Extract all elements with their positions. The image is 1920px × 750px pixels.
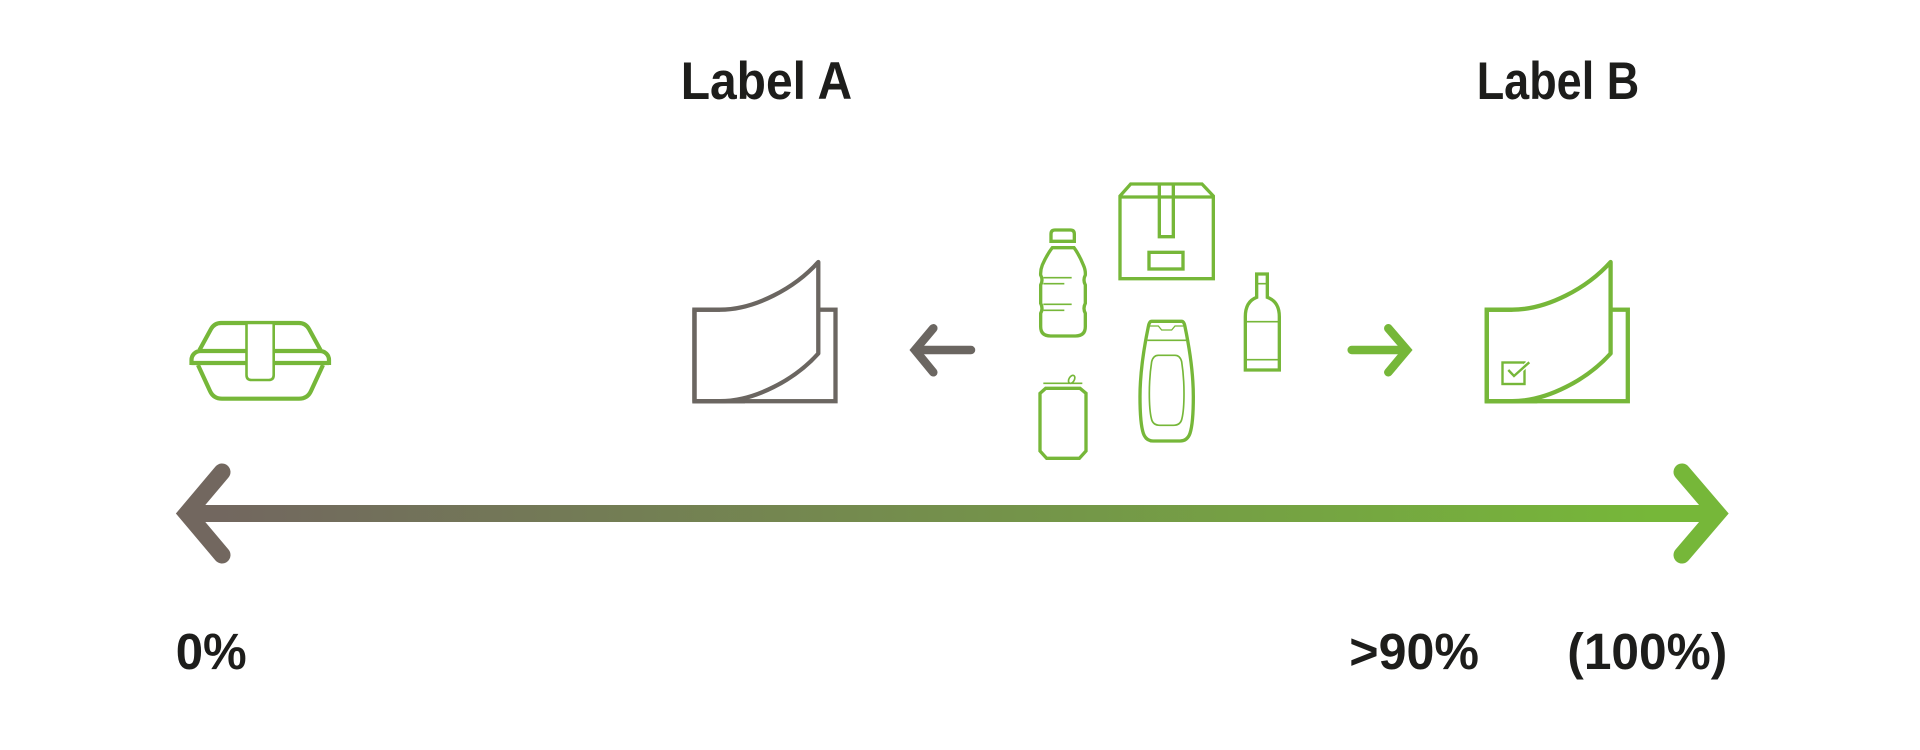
icon: gray sheet of material	[694, 262, 836, 401]
icon: shampoo bottle	[1140, 321, 1193, 441]
value label: (100%): (100%)	[1567, 623, 1727, 680]
icon: check box	[1502, 362, 1529, 384]
icon: cardboard box	[1120, 184, 1213, 279]
heading: Label B: Label B	[1477, 52, 1639, 111]
arrow: small gray pointing left	[915, 328, 971, 372]
heading: Label A: Label A	[681, 52, 852, 111]
arrow: small green pointing right	[1352, 328, 1407, 372]
value label: 0%: 0%	[176, 623, 247, 680]
icon: green certified sheet of material	[1487, 262, 1628, 401]
icon group: packaging items	[1040, 184, 1279, 458]
icon: drink can	[1040, 374, 1086, 458]
icon: food container	[192, 323, 329, 399]
icon: plastic bottle	[1041, 230, 1085, 336]
value label: >90%: >90%	[1349, 623, 1479, 680]
arrow: main scale gradient double arrow	[187, 472, 1718, 555]
icon: wine bottle	[1245, 274, 1279, 370]
